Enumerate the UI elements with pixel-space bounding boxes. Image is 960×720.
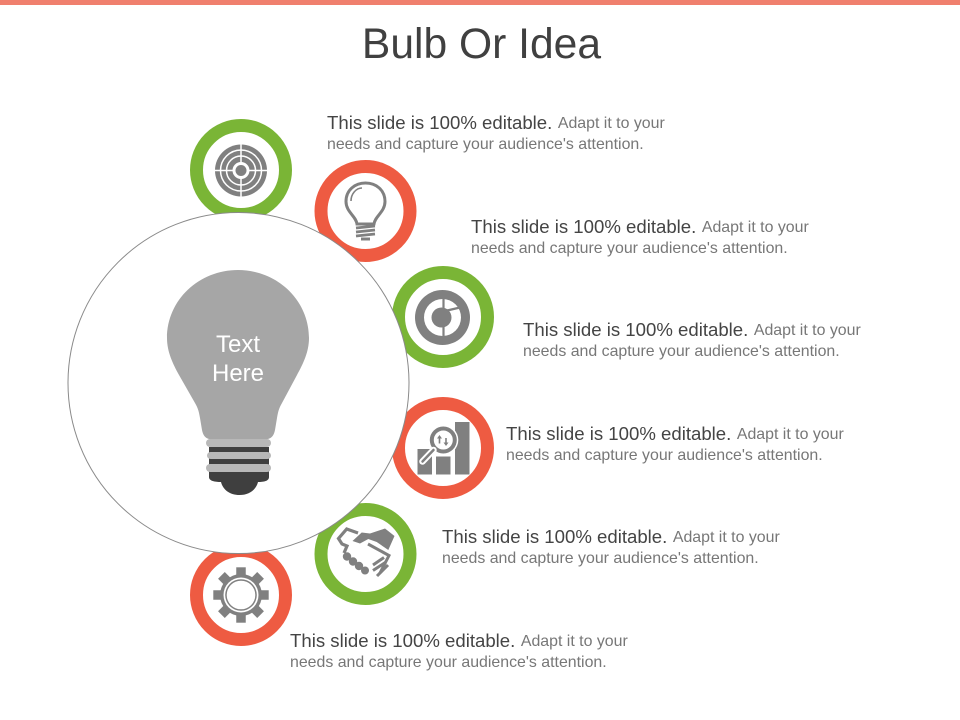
icon: light bulb outline — [346, 183, 385, 239]
text block 3: This slide is 100% editable. Adapt it to your — [523, 318, 861, 340]
icon: gear — [213, 567, 269, 623]
text block 5: needs and capture your audience's attention. — [442, 550, 759, 566]
text block 5: This slide is 100% editable. Adapt it to your — [442, 526, 780, 546]
icon: magnifier over bar chart — [418, 422, 470, 474]
text block 4 — [506, 422, 844, 464]
ring: red gear — [196, 550, 286, 640]
ring: green target — [196, 126, 286, 214]
ring: green handshake — [321, 510, 410, 598]
text block 2 — [471, 216, 809, 256]
icon: handshake — [338, 528, 394, 576]
top accent bar — [0, 0, 960, 5]
central light bulb: Here — [212, 360, 264, 387]
text block 4: needs and capture your audience's attention. — [506, 446, 823, 464]
text block 2: This slide is 100% editable. Adapt it to your — [471, 216, 809, 236]
text block 6: needs and capture your audience's attention. — [290, 654, 607, 670]
central light bulb — [167, 270, 309, 495]
text block 6 — [290, 630, 628, 670]
ring: green chart — [398, 272, 488, 362]
icon: target — [214, 144, 268, 198]
ring: red bulb — [321, 166, 410, 256]
text block 4: This slide is 100% editable. Adapt it to your — [506, 422, 844, 444]
text block 3: needs and capture your audience's attention. — [523, 342, 840, 360]
icon: donut chart — [415, 290, 470, 345]
ring: red analytics — [398, 404, 488, 492]
text block 1 — [327, 112, 665, 152]
text block 3 — [523, 318, 861, 360]
text block 1: needs and capture your audience's attention. — [327, 136, 644, 152]
text block 1: This slide is 100% editable. Adapt it to your — [327, 112, 665, 132]
bulb label: Text — [216, 331, 260, 358]
text block 5 — [442, 526, 780, 566]
text block 6: This slide is 100% editable. Adapt it to your — [290, 630, 628, 650]
text block 2: needs and capture your audience's attention. — [471, 240, 788, 256]
central circle — [68, 212, 409, 554]
title: Bulb Or Idea — [362, 20, 601, 68]
